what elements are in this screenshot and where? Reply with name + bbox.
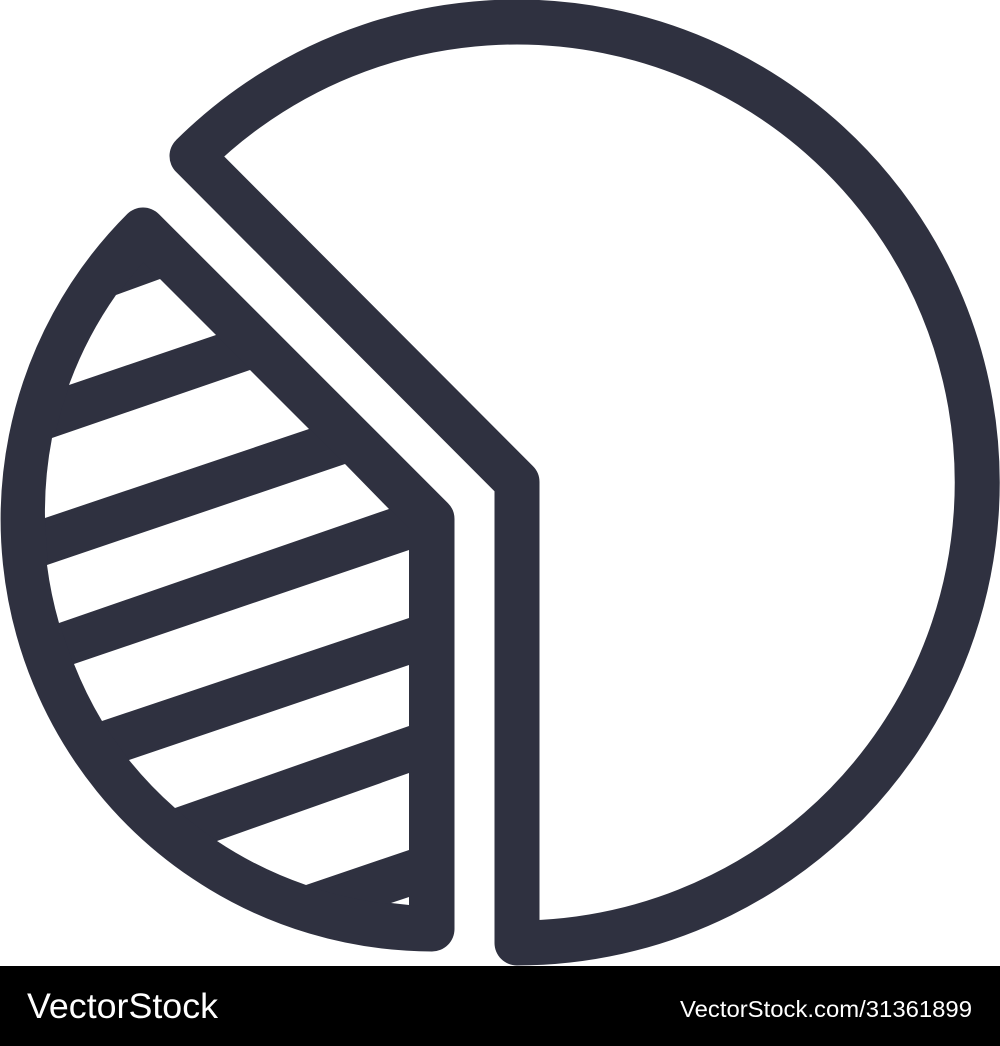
- footer bar: [0, 966, 1000, 1046]
- icon: large pie slice: [192, 22, 977, 943]
- footer image id text: VectorStock.com/31361899: [680, 996, 972, 1022]
- icon: small hatched pie slice: [23, 230, 432, 929]
- footer logo text: VectorStock: [27, 986, 218, 1026]
- slice outline: [23, 230, 432, 929]
- white hatch gaps: [45, 279, 409, 905]
